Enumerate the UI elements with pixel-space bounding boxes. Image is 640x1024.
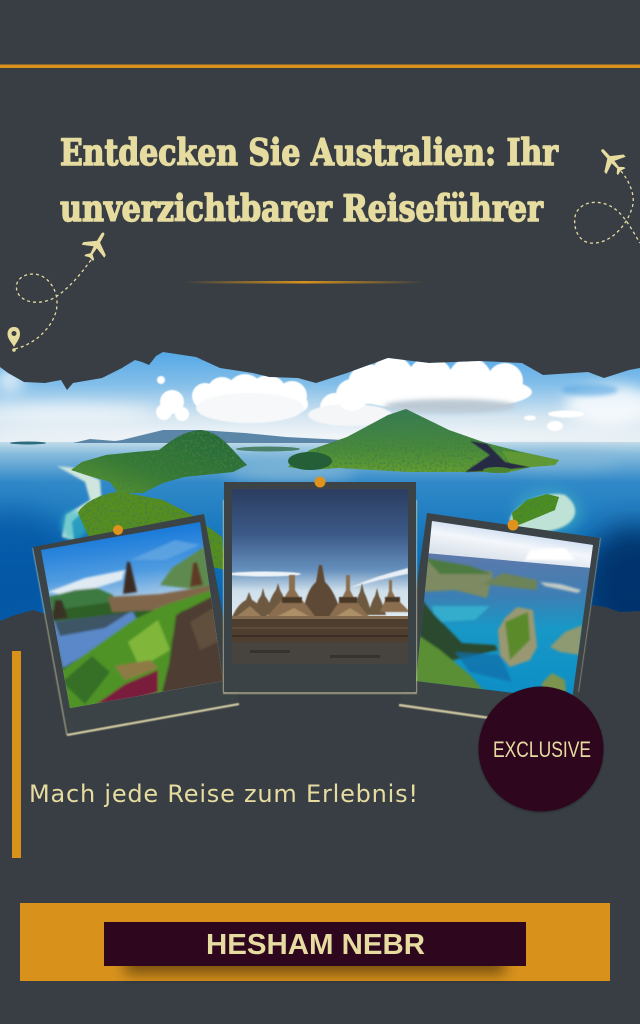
divider rule: [183, 281, 425, 284]
photo card: temple lake, left: [33, 514, 239, 735]
landscape photo panel: [0, 352, 640, 621]
author banner: [20, 903, 610, 981]
accent bar: [12, 651, 21, 858]
photo: temple lake: [41, 522, 223, 708]
icon: flight path left: [14, 260, 91, 349]
photo card: stupas, centre: [224, 476, 416, 693]
tagline: Mach jede Reise zum Erlebnis!: [29, 780, 418, 808]
pin: [113, 525, 123, 535]
title: [60, 132, 559, 230]
photo: coastal cliffs: [416, 521, 593, 696]
author banner: HESHAM NEBR: [206, 929, 425, 961]
icon: flight path right: [575, 171, 640, 243]
badge: exclusive: [478, 686, 604, 812]
icon: plane left: [77, 226, 115, 265]
pin: [314, 476, 326, 488]
icon: location pin: [8, 327, 20, 352]
photo card: coastal cliffs, right: [399, 513, 600, 728]
badge: exclusive: EXCLUSIVE: [493, 737, 591, 762]
photo: stupas: [229, 489, 410, 664]
pin: [508, 520, 518, 530]
title: unverzichtbarer Reiseführer: [60, 188, 544, 230]
icon: plane right: [592, 141, 631, 180]
top orange line: [0, 64, 640, 68]
